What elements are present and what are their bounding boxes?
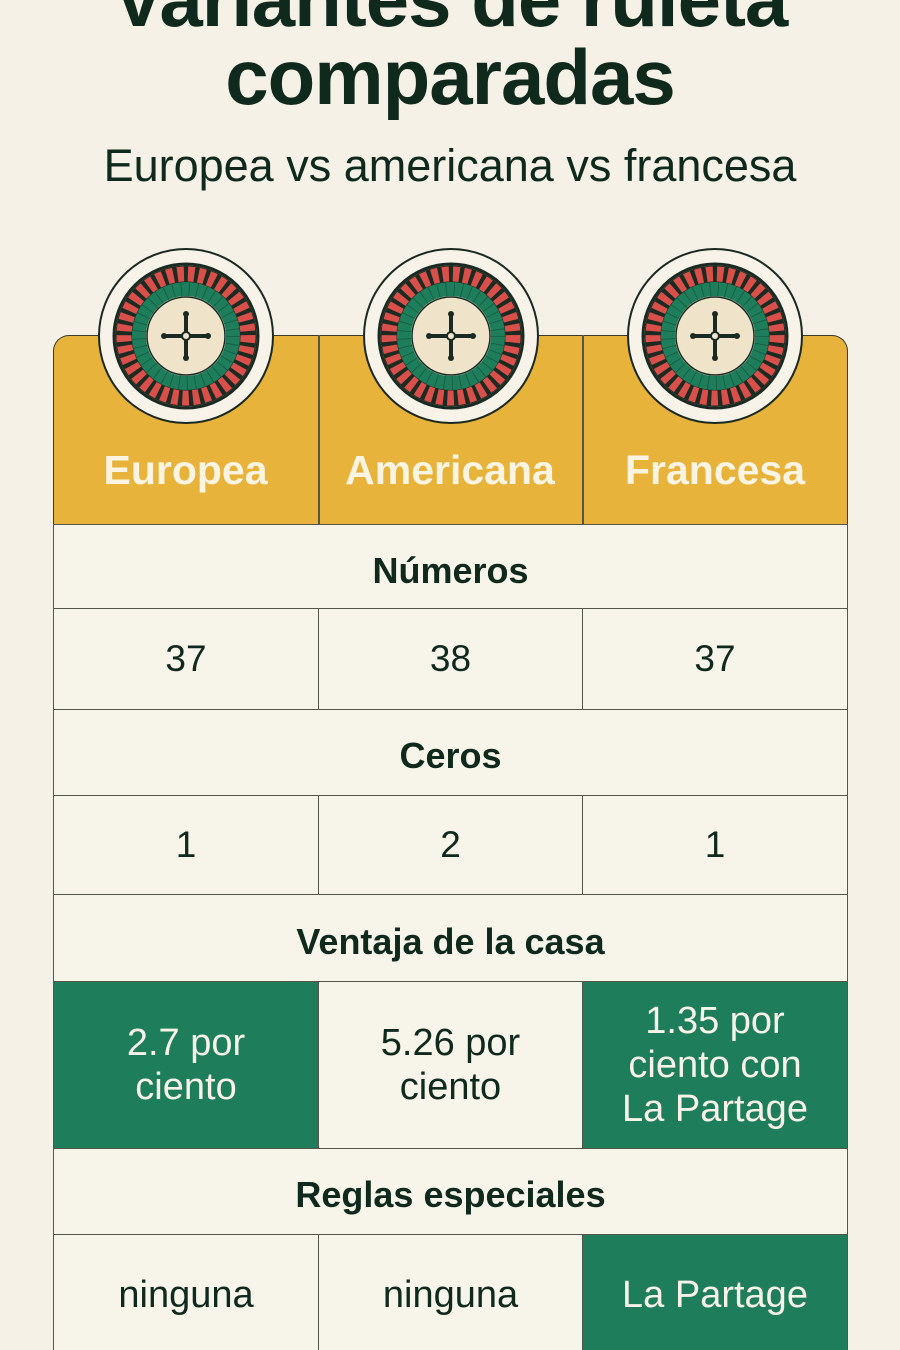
row: Numeros values — [54, 609, 847, 710]
row: Ventaja values — [54, 982, 847, 1149]
row: Reglas values: La Partage — [622, 1274, 808, 1316]
row: Numeros heading: Números — [372, 550, 529, 590]
row: Ventaja heading: Ventaja de la casa — [296, 920, 605, 962]
icon: roulette wheel americana — [363, 248, 539, 424]
title: comparadas — [225, 33, 675, 121]
header dividers — [318, 335, 320, 525]
row: Ventaja values: 2.7 por — [127, 1022, 245, 1064]
row: Ventaja values: La Partage — [622, 1088, 808, 1130]
row: Ventaja values: 5.26 por — [381, 1022, 520, 1064]
row: Ceros heading — [54, 709, 847, 796]
header label: Europea: Europea — [103, 446, 268, 492]
row: Ceros values: 1 — [705, 824, 725, 865]
header label: Americana: Americana — [345, 446, 555, 492]
icon: roulette wheel europea — [98, 248, 274, 424]
row: Numeros values: 37 — [694, 638, 736, 679]
row: Reglas heading: Reglas especiales — [295, 1174, 606, 1215]
row: Ventaja heading — [54, 894, 847, 982]
row: Ceros values: 1 — [176, 824, 196, 865]
row: Numeros values: 38 — [430, 638, 471, 679]
row: Reglas values: ninguna — [383, 1274, 518, 1316]
row: Ventaja values: 1.35 por — [645, 1000, 785, 1042]
title — [113, 0, 789, 121]
table header — [53, 335, 848, 525]
row: Reglas values: ninguna — [118, 1274, 254, 1316]
row: Ceros heading: Ceros — [399, 735, 502, 776]
header label: Francesa: Francesa — [625, 446, 805, 492]
row: Numeros values: 37 — [165, 638, 207, 679]
row: Ceros values: 2 — [440, 824, 461, 865]
row: Numeros heading — [54, 525, 847, 609]
row: Ventaja values: ciento con — [628, 1044, 802, 1086]
table body — [53, 524, 848, 1350]
row: Reglas heading — [54, 1148, 847, 1235]
row: Ceros values — [54, 796, 847, 895]
icon: roulette wheel francesa — [627, 248, 803, 424]
row: Ventaja values: ciento — [135, 1066, 237, 1108]
subtitle: Europea vs americana vs francesa — [104, 140, 796, 191]
row: Ventaja values: ciento — [400, 1066, 501, 1108]
row: Reglas values — [118, 1235, 847, 1350]
